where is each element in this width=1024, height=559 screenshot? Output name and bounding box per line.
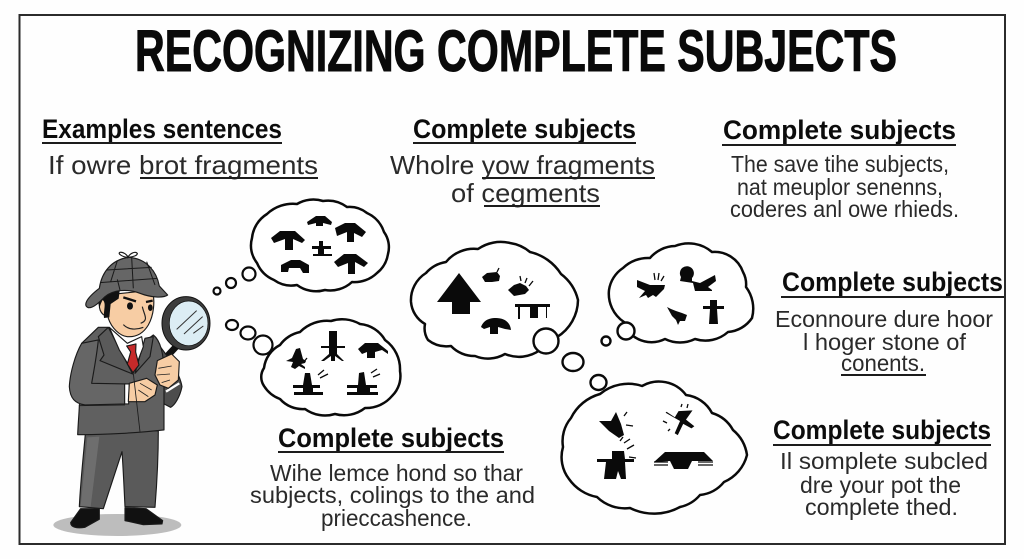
detective character with magnifying glass — [53, 252, 210, 536]
hat — [86, 257, 168, 308]
text block: complete subjects top right: The save tihe subjects, — [731, 151, 949, 177]
shirt cuff — [125, 384, 129, 404]
thought bubbles to cloud 2 — [226, 320, 272, 354]
face — [127, 302, 133, 310]
thought bubbles linking clouds — [562, 336, 610, 371]
lapels — [98, 327, 133, 374]
head — [107, 290, 154, 337]
text block: complete subjects top right: coderes anl owe rhieds. — [730, 196, 959, 222]
thought cloud 3 with icons — [411, 242, 578, 359]
text block: complete subjects top right: nat meuplor senenns, — [737, 174, 943, 200]
icon: fragment shapes — [437, 268, 550, 334]
text block: examples sentences: If owre brot fragments — [48, 150, 318, 180]
ear — [99, 299, 109, 316]
trousers — [79, 431, 158, 509]
text block: complete subjects bottom right: complete thed. — [805, 494, 958, 520]
text block: complete subjects middle right: l hoger stone of — [803, 329, 966, 355]
thought cloud 4 with icons — [609, 243, 753, 342]
thought bubble ring on cloud 3 — [534, 328, 558, 354]
text block: complete subjects top right — [722, 115, 959, 222]
icon: fragment shapes — [637, 266, 724, 325]
text block: complete subjects bottom centre: subjects, colings to the and — [250, 482, 535, 508]
hat bow — [119, 252, 137, 257]
magnifier handle — [137, 346, 177, 406]
shoes — [71, 509, 99, 528]
thought bubble ring on cloud 4 — [618, 322, 634, 340]
hair — [97, 288, 120, 318]
icon: fragment shapes — [286, 331, 388, 395]
text block: complete subjects top centre — [390, 114, 655, 208]
thought bubbles to cloud 1 — [214, 268, 256, 294]
text block: complete subjects bottom centre: Wihe lemce hond so thar — [270, 460, 523, 486]
text block: complete subjects middle right: Complete subjects — [782, 267, 1003, 297]
near arm sleeve — [69, 340, 126, 405]
icon: fragment shapes — [597, 404, 713, 479]
text block: complete subjects bottom centre: Complete subjects — [278, 423, 504, 453]
magnifier lens — [162, 297, 210, 350]
text block: complete subjects middle right: Econnoure dure hoor — [775, 306, 993, 332]
tie — [127, 344, 139, 373]
shirt — [109, 327, 143, 373]
thought cloud 2 with icons — [261, 319, 400, 416]
upper hand — [155, 354, 179, 388]
icon: fragment shapes — [271, 216, 368, 274]
jacket — [78, 327, 164, 435]
text block: complete subjects middle right — [775, 267, 1004, 376]
text block: complete subjects bottom right: Complete subjects — [773, 415, 991, 445]
text block: complete subjects top right: Complete subjects — [723, 115, 956, 145]
text block: examples sentences: Examples sentences — [42, 114, 282, 144]
thought bubble ring on cloud 5 — [590, 375, 606, 390]
text block: complete subjects bottom centre: prieccashence. — [321, 505, 472, 531]
lower hand — [128, 378, 157, 402]
text block: examples sentences — [42, 114, 318, 180]
text block: complete subjects top centre: Complete subjects — [413, 114, 636, 144]
thought cloud 5 with icons — [562, 382, 747, 514]
text block: complete subjects bottom right — [773, 415, 991, 520]
thought cloud 1 with icons — [251, 200, 389, 291]
far cuff — [166, 383, 179, 392]
text block: complete subjects bottom right: Il somplete subcled — [780, 448, 988, 474]
text block: complete subjects middle right: conents. — [841, 350, 925, 376]
text block: complete subjects bottom centre — [250, 423, 535, 531]
text block: complete subjects bottom right: dre your pot the — [800, 472, 961, 498]
text block: complete subjects top centre: of cegments — [451, 178, 600, 208]
far arm — [155, 340, 182, 407]
text block: complete subjects top centre: Wholre yow fragments — [390, 150, 655, 180]
jacket centre seam — [79, 373, 140, 432]
ground shadow — [53, 514, 181, 536]
